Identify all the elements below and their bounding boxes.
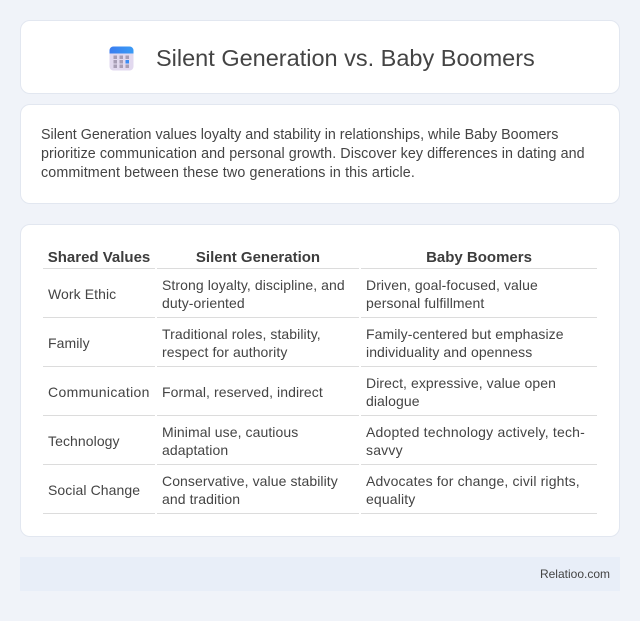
row: Communication: Communication [48,384,150,400]
Technology: Silent Generation: Minimal use, cautious [162,424,298,440]
Family: Silent Generation: Traditional roles, stability, [162,326,321,342]
Social Change: Silent Generation: and tradition [162,491,240,507]
column heading: Baby Boomers: Baby Boomers [426,249,532,266]
Communication: Baby Boomers [366,375,556,409]
comparison table panel [20,224,620,537]
intro text: prioritize communication and personal growth. Discover key differences in dating and [41,146,585,162]
title: Silent Generation vs. Baby Boomers [156,45,535,71]
Social Change: Baby Boomers [366,473,580,507]
Family: Baby Boomers [366,326,564,360]
Technology: Baby Boomers: Adopted technology actively, tech- [366,424,585,440]
Communication: Baby Boomers: Direct, expressive, value open [366,375,556,391]
icon: calendar [110,46,134,70]
row: Family: Family [48,335,90,351]
Social Change: Baby Boomers: Advocates for change, civil rights, [366,473,580,489]
Technology: Baby Boomers: savvy [366,442,403,458]
Social Change: Silent Generation [162,473,338,507]
column heading: Shared Values: Shared Values [48,249,150,266]
Technology: Silent Generation [162,424,298,458]
Work Ethic: Baby Boomers: Driven, goal-focused, value [366,277,538,293]
Social Change: Baby Boomers: equality [366,491,415,507]
Work Ethic: Silent Generation [162,277,345,311]
row: Social Change: Social Change [48,482,140,498]
row: Work Ethic: Work Ethic [48,286,116,302]
header panel [20,20,620,94]
Social Change: Silent Generation: Conservative, value stability [162,473,338,489]
Communication: Baby Boomers: dialogue [366,393,420,409]
row: Technology: Technology [48,433,120,449]
footer bar [20,557,620,591]
Family: Silent Generation [162,326,321,360]
Work Ethic: Baby Boomers [366,277,538,311]
Family: Baby Boomers: Family-centered but emphasize [366,326,564,342]
Family: Silent Generation: respect for authority [162,344,287,360]
column heading: Silent Generation: Silent Generation [196,249,320,266]
Work Ethic: Baby Boomers: personal fulfillment [366,295,484,311]
Communication: Silent Generation: Formal, reserved, indirect [162,384,323,400]
intro text: Silent Generation values loyalty and stability in relationships, while Baby Boomers [41,127,558,143]
Technology: Baby Boomers [366,424,585,458]
footer credit: Relatioo.com [540,567,610,581]
Work Ethic: Silent Generation: duty-oriented [162,295,245,311]
intro panel [20,104,620,204]
Work Ethic: Silent Generation: Strong loyalty, discipline, and [162,277,345,293]
intro text: commitment between these two generations in this article. [41,165,415,181]
intro text [41,127,585,181]
Family: Baby Boomers: individuality and openness [366,344,532,360]
Technology: Silent Generation: adaptation [162,442,228,458]
